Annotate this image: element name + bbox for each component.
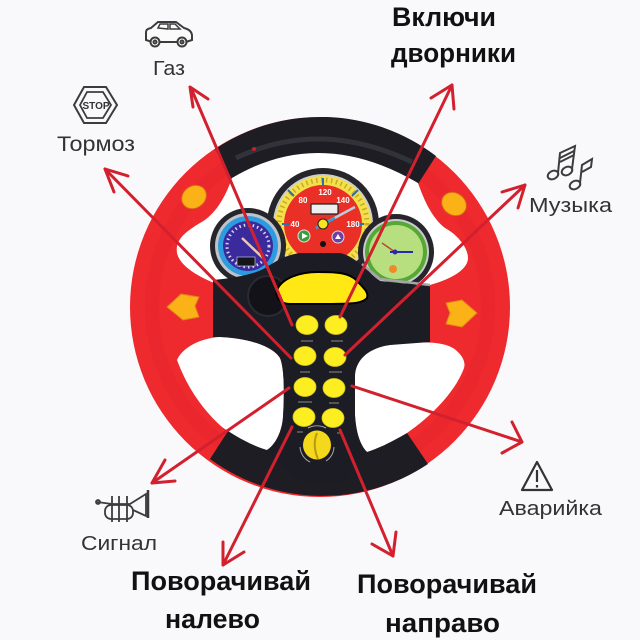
heading: turn right: направо	[385, 608, 500, 638]
speed numbers: 40	[291, 220, 300, 229]
wheel rim red	[130, 117, 510, 497]
heading: turn left: Поворачивай	[131, 566, 311, 596]
speed numbers: 180	[346, 220, 360, 229]
left gauge	[210, 208, 286, 284]
yellow horn pad	[277, 272, 367, 304]
label: hazard: Аварийка	[499, 498, 603, 520]
arrow: turn left	[223, 427, 292, 565]
hub highlight	[362, 264, 430, 285]
rim red dot	[252, 147, 256, 151]
icon: car	[146, 22, 192, 46]
icon: trumpet	[96, 490, 148, 522]
hub dark socket	[248, 276, 288, 316]
speed numbers	[291, 188, 360, 229]
icon: stop sign	[74, 87, 117, 123]
arrow: brake	[105, 169, 291, 358]
rim highlights	[236, 139, 412, 162]
heading: wipers: дворники	[391, 38, 516, 68]
right gauge	[358, 214, 434, 290]
heading: turn left	[131, 566, 311, 634]
rim shading band	[152, 139, 488, 475]
right turn pad	[446, 300, 477, 327]
speed numbers: 140	[336, 196, 350, 205]
label: brake: Тормоз	[57, 133, 135, 156]
right horn ellipse	[437, 188, 471, 220]
yellow buttons	[293, 316, 347, 428]
label: music: Музыка	[529, 195, 613, 217]
rim top black section	[215, 117, 436, 184]
arrow: gas	[190, 87, 292, 325]
heading: turn right: Поворачивай	[357, 569, 537, 599]
speed numbers: 120	[318, 188, 332, 197]
rim bottom black section	[210, 428, 428, 496]
label: gas: Газ	[153, 58, 185, 80]
arrow: horn signal	[152, 388, 289, 483]
lower left opening	[177, 337, 284, 450]
top opening	[177, 153, 468, 285]
steering wheel	[130, 117, 510, 497]
icon: music notes	[546, 146, 592, 191]
lower right opening	[355, 342, 465, 452]
left turn pad	[167, 294, 199, 320]
icon: warning triangle	[522, 462, 552, 490]
heading: wipers	[391, 2, 516, 68]
speed numbers: 80	[299, 196, 308, 205]
arrow: hazard	[352, 386, 522, 453]
left horn ellipse	[177, 181, 211, 213]
arrow: turn right	[340, 430, 396, 556]
heading: turn right	[357, 569, 537, 638]
central hub	[213, 253, 430, 482]
arrow: music	[345, 185, 525, 355]
icon: stop sign: STOP	[82, 101, 110, 112]
knob	[300, 426, 334, 462]
arrow: wipers	[340, 85, 454, 317]
heading: wipers: Включи	[392, 2, 496, 32]
speedometer	[267, 168, 379, 280]
label: signal: Сигнал	[81, 533, 157, 555]
button legends	[297, 341, 343, 433]
heading: turn left: налево	[165, 604, 260, 634]
